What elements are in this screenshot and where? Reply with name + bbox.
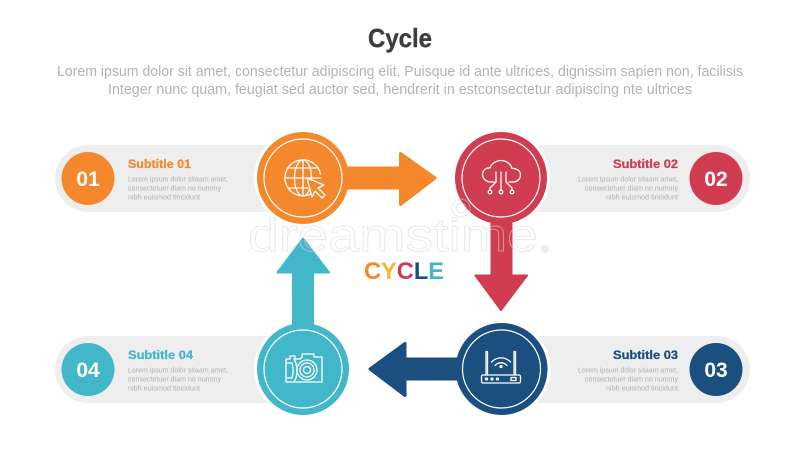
step 01 [62, 132, 349, 224]
icon: wifi router [482, 352, 520, 383]
arrow: navy, pointing left [370, 344, 465, 396]
panel: step 03 background [500, 336, 750, 403]
body text 04: nibh euismod tincidunt [128, 384, 200, 392]
body text 02 [578, 174, 678, 202]
body text 03: Lorem ipsum dolor sitaam amet, [578, 366, 678, 374]
arrow: orange, pointing right [340, 154, 435, 204]
number badge 01 [62, 152, 114, 205]
subtitle 04: Subtitle 04 [128, 348, 193, 362]
body text 02: consectetuer diam no nummy [585, 184, 678, 192]
number badge 02 [690, 152, 742, 205]
step 04 [62, 323, 349, 415]
body text 04: Lorem ipsum dolor sitaam amet, [128, 366, 228, 374]
subtitle 03: Subtitle 03 [613, 348, 678, 362]
number badge 04 [62, 343, 114, 396]
body text 01: Lorem ipsum dolor sitaam amet, [128, 174, 228, 184]
subtitle 02: Subtitle 02 [613, 157, 678, 171]
number 02: 02 [704, 168, 728, 191]
step 02 [455, 132, 742, 224]
body text 01: consectetuer diam no nummy [128, 184, 221, 192]
center label: CYCLE: CYCLE [364, 258, 444, 285]
intro text [57, 64, 743, 98]
icon: camera [286, 354, 322, 382]
watermark [248, 199, 549, 261]
watermark: dreamstime [248, 209, 538, 261]
panel: step 01 background [55, 145, 305, 212]
panel: step 02 background [500, 145, 750, 212]
title: Cycle [368, 23, 432, 53]
body text 01: nibh euismod tincidunt [128, 192, 200, 202]
circle 02 [455, 132, 547, 224]
arrow: red, pointing down [476, 215, 527, 310]
circle 03 [456, 323, 548, 415]
panel: step 04 background [55, 336, 305, 403]
body text 02: nibh euismod tincidunt [606, 192, 678, 202]
circle 01 [257, 132, 349, 224]
body text 04: consectetuer diam no nummy [128, 374, 221, 384]
number 04: 04 [76, 359, 100, 382]
body text 03: nibh euismod tincidunt [606, 384, 678, 392]
arrow: teal, pointing up [278, 238, 329, 330]
body text 04 [128, 366, 228, 392]
circle 04 [257, 323, 349, 415]
intro text: Lorem ipsum dolor sit amet, consectetur adipiscing elit. Puisque id ante ultrices, dignissim sapien non, facilisis [57, 64, 743, 80]
body text 01 [128, 174, 228, 202]
intro text: Integer nunc quam, feugiat sed auctor sed, hendrerit in estconsectetur adipiscing nte ultrices [108, 82, 692, 98]
number 03: 03 [704, 359, 728, 382]
body text 02: Lorem ipsum dolor sitaam amet, [578, 174, 678, 184]
icon: globe with cursor [285, 160, 325, 198]
body text 03: consectetuer diam no nummy [585, 374, 678, 384]
white halos behind circles [254, 129, 550, 418]
number 01: 01 [76, 168, 100, 191]
step 03 [456, 323, 742, 415]
number badge 03 [690, 343, 742, 396]
icon: cloud network [482, 160, 520, 194]
body text 03 [578, 366, 678, 392]
subtitle 01: Subtitle 01 [128, 157, 191, 171]
